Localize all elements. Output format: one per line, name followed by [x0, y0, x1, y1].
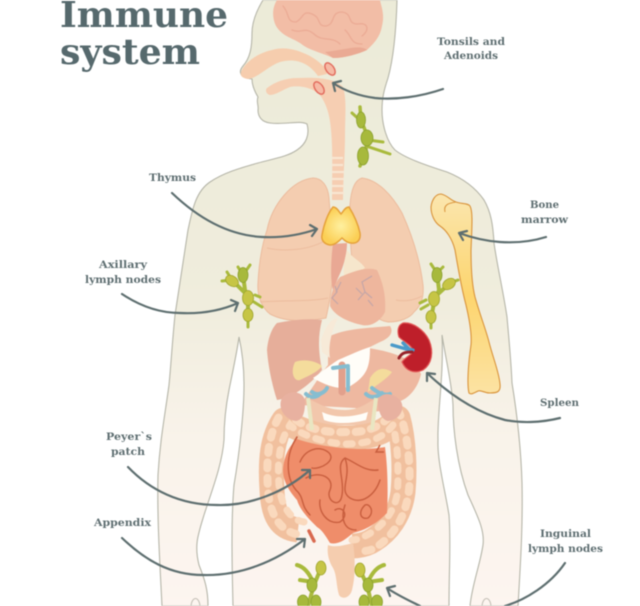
arrow: axillary [122, 294, 238, 313]
arrow: peyer's patch [128, 467, 310, 505]
blood vessels [312, 365, 390, 395]
gallbladder and pancreas [293, 318, 392, 392]
spleen [392, 323, 432, 372]
icon: hand outline hints [191, 598, 491, 606]
label: tonsils and adenoids: Tonsils and [437, 36, 505, 48]
label: spleen: Spleen [540, 397, 580, 409]
body silhouette [158, 0, 522, 606]
label: inguinal lymph nodes: Inguinal [540, 528, 591, 540]
arrow: spleen [427, 373, 560, 422]
label: bone marrow: marrow [521, 214, 568, 226]
title [60, 0, 228, 73]
right lung [350, 178, 423, 322]
label: tonsils and adenoids: Adenoids [443, 50, 498, 62]
label: axillary lymph nodes: lymph nodes [85, 274, 161, 286]
kidneys [280, 392, 402, 421]
throat and trachea [266, 78, 346, 200]
title: system [60, 32, 200, 73]
label: thymus: Thymus [149, 172, 196, 184]
lymph nodes: right inguinal [355, 563, 384, 606]
rectum [328, 543, 355, 598]
abdominal cavity [313, 347, 370, 388]
lymph nodes: left inguinal [297, 561, 326, 606]
kidneys and ureters [306, 393, 382, 425]
label: bone marrow: Bone [530, 199, 560, 211]
nasal cavity [241, 48, 327, 79]
arrow: inguinal [387, 563, 565, 606]
label: peyer's patch [106, 431, 152, 458]
liver [267, 319, 322, 400]
label: inguinal lymph nodes: lymph nodes [528, 543, 603, 555]
stomach [300, 326, 421, 411]
arrow: tonsils [333, 81, 443, 99]
small intestine [283, 437, 388, 543]
heart [330, 269, 385, 325]
appendix [309, 531, 314, 541]
arrow: appendix [122, 538, 305, 575]
lymph node: neck [352, 107, 390, 166]
label: bone marrow [521, 199, 568, 226]
bone marrow: humerus [431, 194, 500, 394]
label: axillary lymph nodes [85, 259, 161, 286]
arrow: bone marrow [459, 231, 546, 242]
label: inguinal lymph nodes [528, 528, 603, 555]
tonsils [312, 61, 337, 96]
lymph nodes: right axilla [420, 264, 458, 328]
arrow: thymus [172, 193, 317, 237]
ureters [308, 398, 376, 430]
label: peyer's patch: patch [111, 446, 146, 458]
label: axillary lymph nodes: Axillary [98, 259, 148, 271]
label: appendix: Appendix [93, 517, 152, 529]
lung lobe lines [260, 240, 422, 302]
left lung [258, 178, 334, 321]
brain [273, 0, 383, 58]
lymph nodes: left axilla [222, 265, 262, 327]
label: peyer's patch: Peyer`s [106, 431, 152, 443]
label: tonsils and adenoids [437, 36, 505, 62]
thymus [322, 207, 360, 245]
windpipe and aorta [331, 243, 365, 290]
large intestine [267, 410, 410, 551]
